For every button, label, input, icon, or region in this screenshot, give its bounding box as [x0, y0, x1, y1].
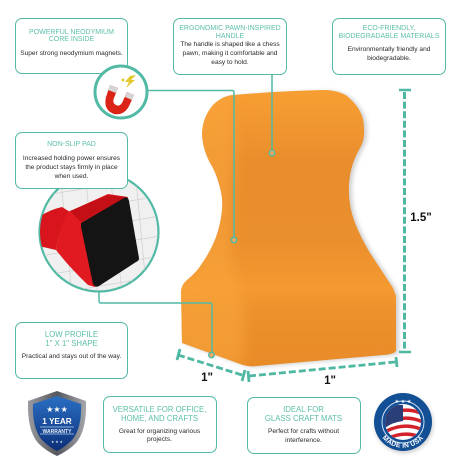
panel: low profile shape: 1" X 1" SHAPE [45, 339, 98, 348]
panel: eco-friendly materials: biodegradable. [367, 55, 411, 62]
panel: versatile use: projects. [147, 436, 172, 443]
badge: 1 year warranty [28, 391, 86, 456]
panel: non-slip pad: the product stays firmly in place [25, 164, 118, 171]
panel: non-slip pad: Increased holding power ensures [23, 155, 120, 162]
dimension: height 1.5 inches [399, 90, 411, 352]
panel: ergonomic handle: easy to hold. [211, 59, 249, 66]
panel: low profile shape [15, 322, 128, 378]
photo: non-slip pad in circle [38, 170, 160, 296]
panel: versatile use: HOME, AND CRAFTS [121, 414, 198, 422]
dimension: width 1 inch [248, 357, 397, 382]
panel: low profile shape: Practical and stays out of the way. [22, 353, 121, 360]
badge: 1 year warranty: WARRANTY [43, 429, 72, 435]
panel: ergonomic handle: ERGONOMIC PAWN-INSPIRED [179, 25, 281, 32]
label: 1.5 inch height: 1.5" [410, 212, 432, 224]
panel: eco-friendly materials: Environmentally friendly and [348, 46, 430, 53]
panel: non-slip pad: NON-SLIP PAD [47, 140, 96, 148]
panel: ideal for glass craft mats [246, 396, 360, 454]
panel: ideal for glass craft mats: GLASS CRAFT MATS [265, 414, 342, 423]
panel: versatile use: Great for organizing various [119, 428, 200, 434]
badge: 1 year warranty: ★ ★ ★ [51, 440, 63, 444]
badge: 1 year warranty: 1 YEAR [42, 417, 72, 426]
panel: eco-friendly materials: BIODEGRADABLE MATERIALS [338, 33, 440, 40]
dimension: depth 1 inch [177, 349, 245, 381]
panel: ideal for glass craft mats: IDEAL FOR [283, 405, 324, 414]
icon: horseshoe magnet in circle [94, 64, 148, 120]
panel: non-slip pad: when used. [55, 172, 88, 180]
panel: powerful neodymium core: POWERFUL NEODYMIUM [29, 28, 114, 36]
panel: ergonomic handle: pawn, making it comfortable and [183, 50, 277, 57]
product and connector artwork [28, 75, 435, 456]
panel: eco-friendly materials [332, 18, 446, 74]
badge: made in USA: MADE IN USA [382, 435, 424, 448]
panel: non-slip pad [15, 132, 128, 189]
connector lines [99, 74, 275, 358]
panel: versatile use: VERSATILE FOR OFFICE, [113, 404, 206, 414]
badge: made in USA: ★ ★ ★ [395, 399, 412, 405]
badge: made in USA [373, 393, 435, 455]
panel: powerful neodymium core: CORE INSIDE [49, 36, 94, 43]
label: 1 inch depth: 1" [201, 372, 213, 384]
badge: 1 year warranty: ★★★ [46, 405, 68, 414]
panel: versatile use [102, 396, 216, 453]
panel: ergonomic handle [173, 18, 287, 74]
panel: ergonomic handle: HANDLE [216, 33, 244, 40]
panel: eco-friendly materials: ECO-FRIENDLY, [363, 25, 415, 32]
panel: ergonomic handle: The handle is shaped like a chess [180, 41, 280, 48]
product: orange pawn magnet [170, 85, 399, 370]
label: 1 inch width: 1" [324, 375, 336, 387]
panel: low profile shape: LOW PROFILE [45, 330, 98, 339]
panel: ideal for glass craft mats: interference. [285, 437, 322, 444]
panel: powerful neodymium core: Super strong neodymium magnets. [20, 50, 123, 57]
panel: ideal for glass craft mats: Perfect for crafts without [268, 428, 339, 435]
panel: powerful neodymium core [15, 18, 128, 74]
